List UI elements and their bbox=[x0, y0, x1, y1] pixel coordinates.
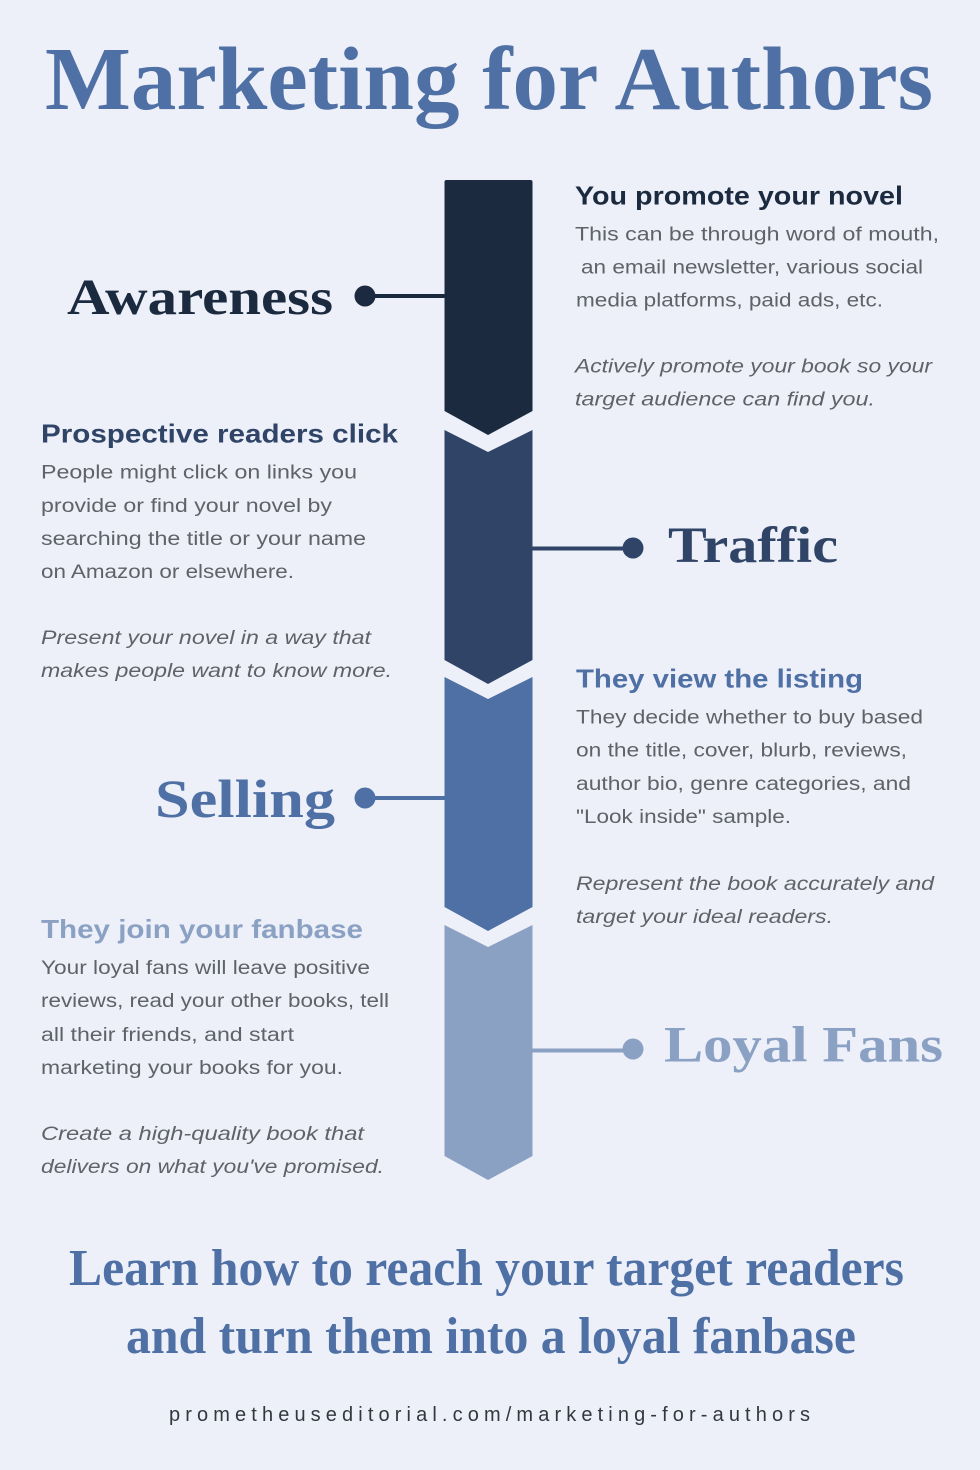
text block: you promote your novel bbox=[574, 180, 939, 410]
text block: prospective readers click: on Amazon or elsewhere. bbox=[41, 562, 294, 583]
text block: they view the listing: They view the listing bbox=[576, 664, 863, 694]
text block: prospective readers click: makes people want to know more. bbox=[41, 661, 392, 682]
text block: prospective readers click: Prospective readers click bbox=[41, 418, 399, 448]
text block: you promote your novel: media platforms, paid ads, etc. bbox=[576, 290, 883, 312]
label: Loyal Fans: Loyal Fans bbox=[664, 1018, 943, 1074]
text block: they view the listing: author bio, genre categories, and bbox=[576, 774, 911, 795]
label: Selling bbox=[155, 769, 445, 829]
label: Awareness bbox=[67, 270, 445, 326]
text block: you promote your novel: Actively promote your book so your bbox=[574, 356, 933, 378]
title: Marketing for Authors bbox=[45, 30, 933, 129]
text block: prospective readers click: People might click on links you bbox=[41, 462, 357, 484]
text block: they view the listing: "Look inside" sample. bbox=[576, 807, 791, 828]
funnel stage: awareness chevron bbox=[444, 180, 532, 435]
label: Selling: Selling bbox=[155, 769, 335, 829]
text block: prospective readers click: provide or find your novel by bbox=[41, 496, 333, 517]
label: Loyal Fans bbox=[532, 1018, 943, 1074]
funnel stage: traffic chevron bbox=[444, 430, 532, 684]
label: Traffic bbox=[532, 518, 838, 574]
website url: prometheuseditorial.com/marketing-for-authors bbox=[169, 1404, 810, 1426]
text block: they join your fanbase: Your loyal fans will leave positive bbox=[41, 958, 370, 979]
text block: you promote your novel: an email newsletter, various social bbox=[581, 258, 923, 278]
funnel stage: selling chevron bbox=[444, 677, 532, 931]
funnel stage: loyal fans chevron bbox=[444, 925, 532, 1180]
call to action: and turn them into a loyal fanbase bbox=[126, 1308, 856, 1365]
text block: they view the listing: Represent the book accurately and bbox=[576, 874, 936, 895]
text block: prospective readers click: Present your novel in a way that bbox=[41, 628, 372, 649]
text block: they view the listing: on the title, cover, blurb, reviews, bbox=[576, 740, 907, 762]
text block: prospective readers click bbox=[41, 418, 399, 682]
label: Traffic: Traffic bbox=[668, 518, 838, 574]
text block: they join your fanbase bbox=[41, 914, 389, 1178]
text block: they view the listing: target your ideal readers. bbox=[576, 907, 833, 928]
text block: they join your fanbase: all their friends, and start bbox=[41, 1025, 295, 1046]
text block: you promote your novel: This can be through word of mouth, bbox=[575, 224, 939, 246]
text block: they join your fanbase: reviews, read your other books, tell bbox=[41, 991, 389, 1012]
text block: you promote your novel: You promote your novel bbox=[575, 180, 903, 210]
text block: they join your fanbase: Create a high-quality book that bbox=[41, 1124, 365, 1145]
text block: they join your fanbase: marketing your books for you. bbox=[41, 1058, 343, 1079]
text block: you promote your novel: target audience can find you. bbox=[575, 390, 875, 410]
text block: they view the listing bbox=[576, 664, 936, 928]
text block: prospective readers click: searching the title or your name bbox=[41, 529, 366, 550]
text block: they view the listing: They decide whether to buy based bbox=[576, 708, 923, 728]
text block: they join your fanbase: They join your fanbase bbox=[41, 914, 363, 944]
call to action bbox=[69, 1240, 904, 1365]
text block: they join your fanbase: delivers on what you've promised. bbox=[41, 1157, 384, 1178]
label: Awareness: Awareness bbox=[67, 270, 333, 326]
call to action: Learn how to reach your target readers bbox=[69, 1240, 904, 1297]
